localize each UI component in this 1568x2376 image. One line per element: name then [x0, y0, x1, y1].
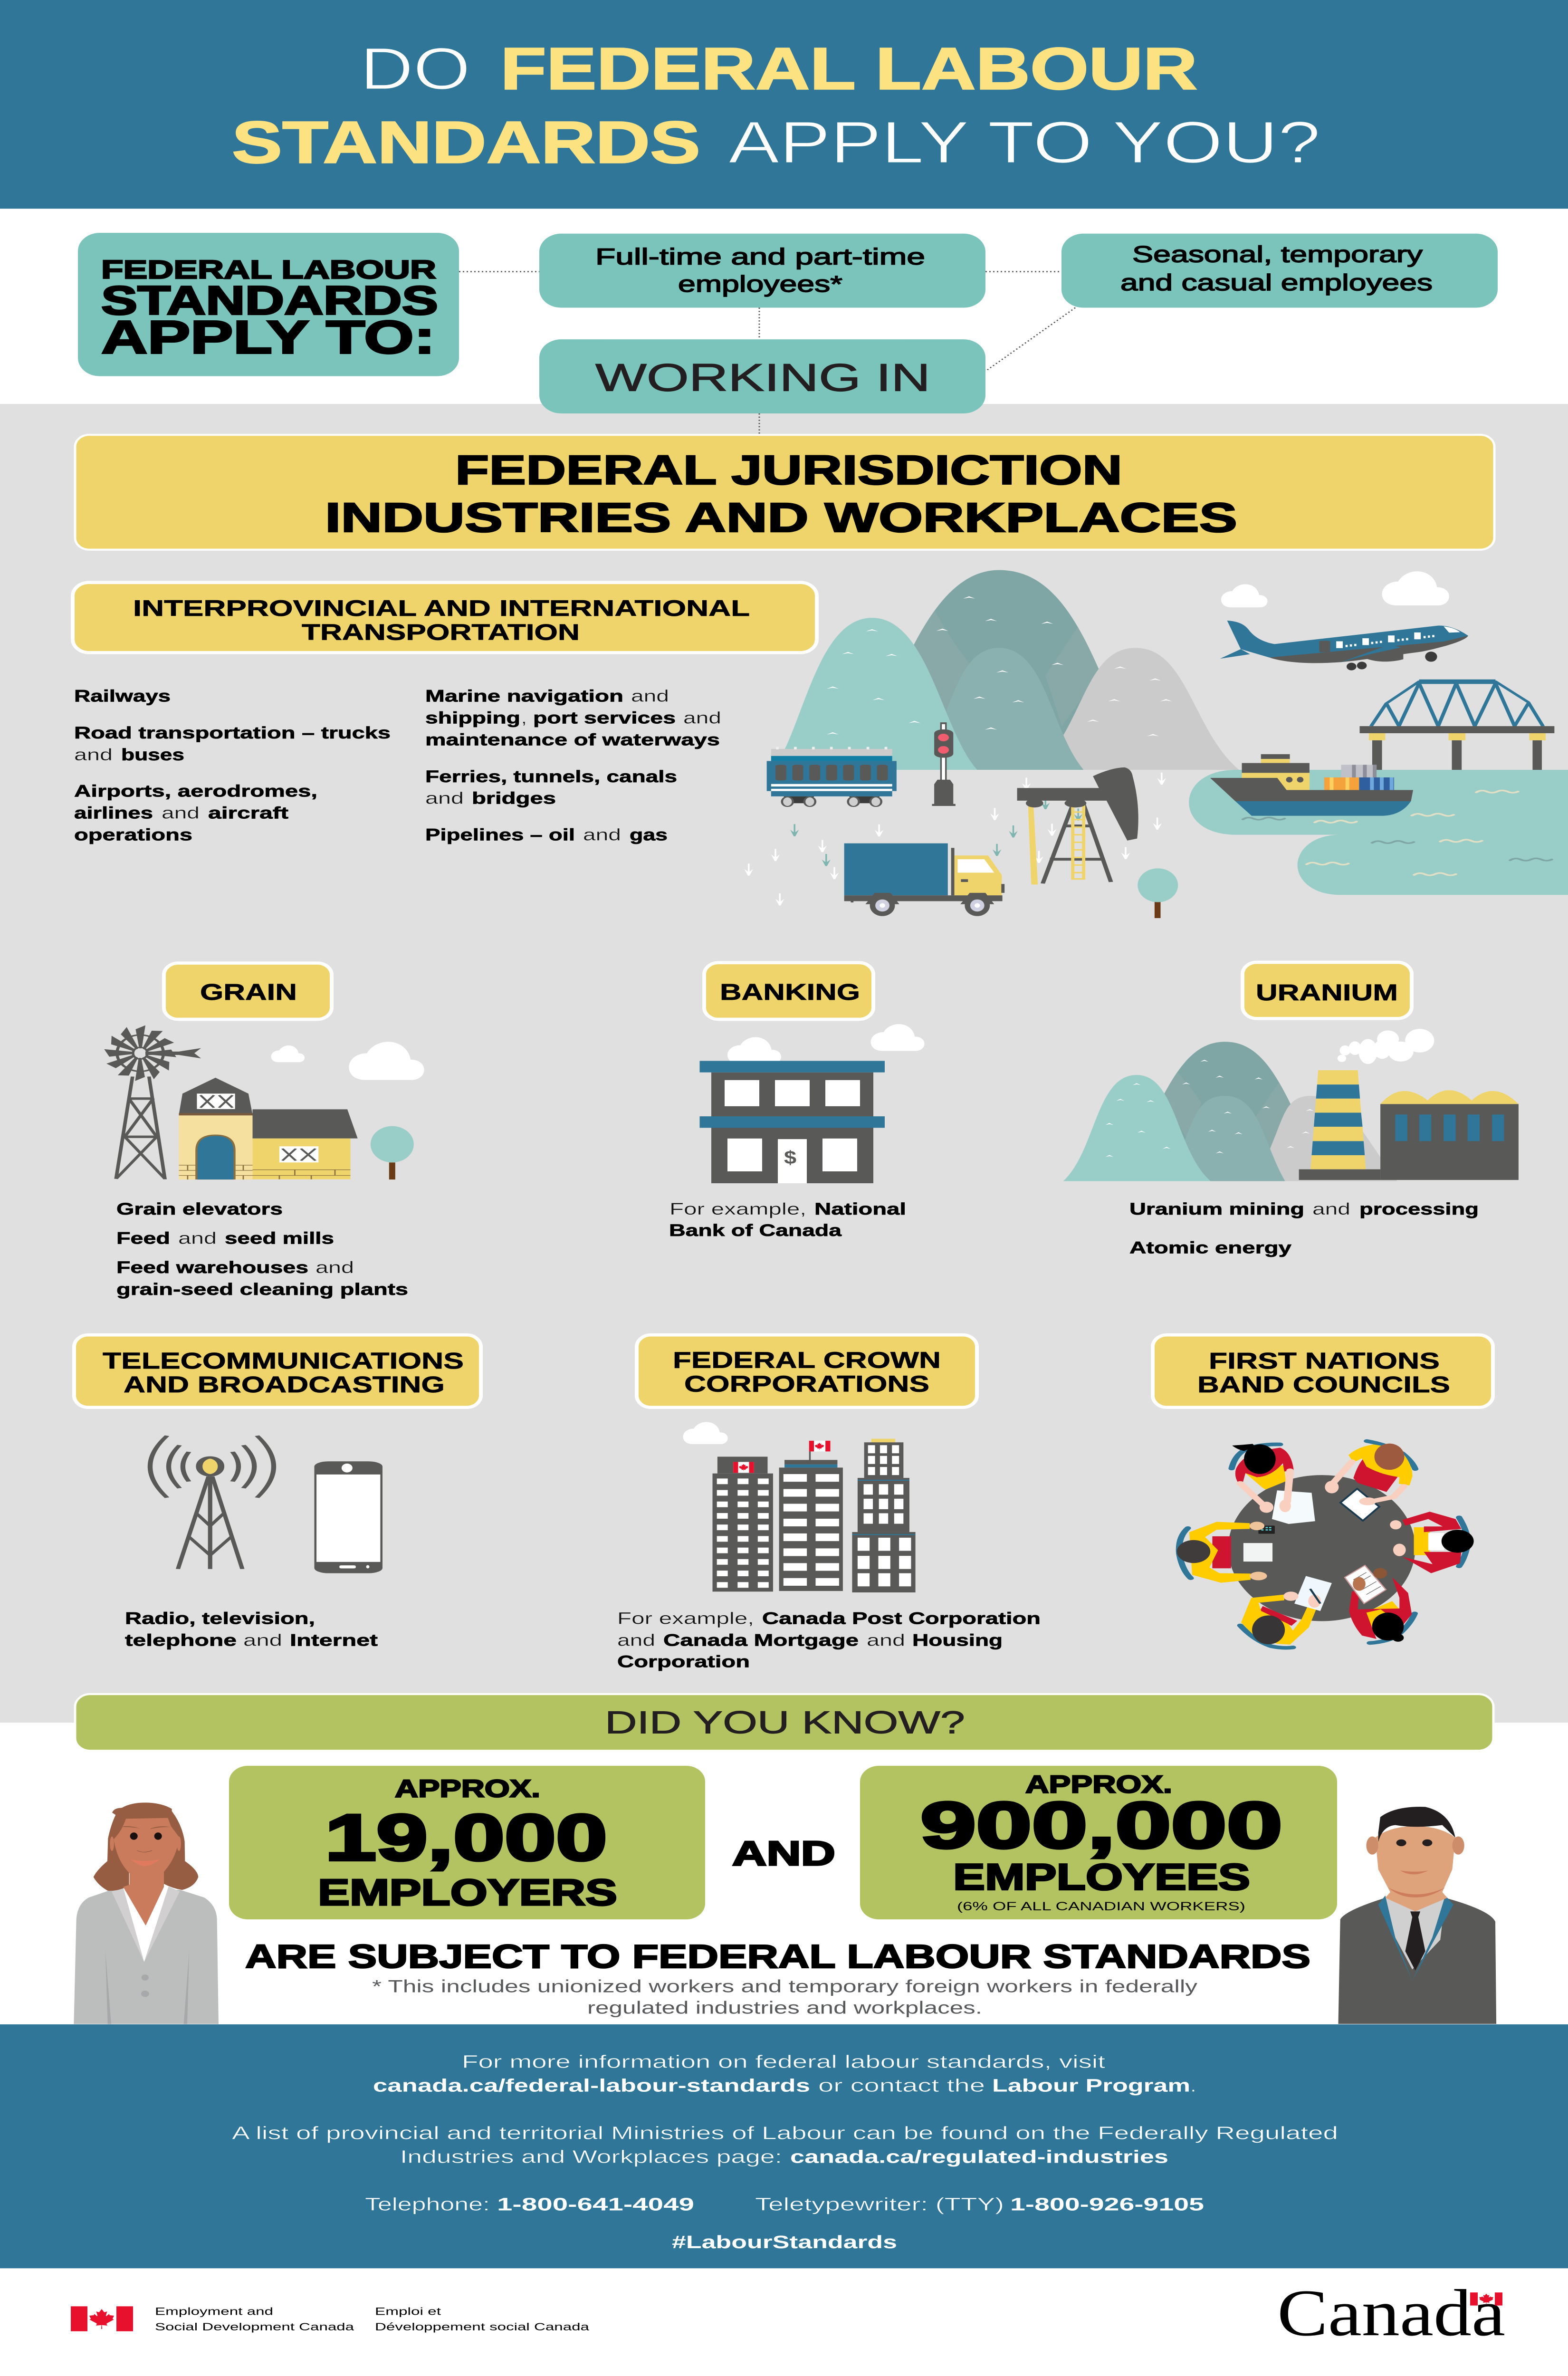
icon: windmill — [104, 1025, 201, 1179]
stat: 19,000 employers: 19,000 — [325, 1801, 607, 1874]
stat: 19,000 employers — [229, 1766, 705, 1919]
stepped tower — [852, 1439, 916, 1592]
text block: uranium list: processing — [1359, 1200, 1479, 1218]
text block: transportation list right: Marine navigation — [425, 687, 623, 706]
text block: banking example: National — [814, 1200, 906, 1218]
department names: Social Development Canada — [155, 2321, 354, 2333]
icon: tree — [371, 1126, 414, 1179]
text block: ministries of labour: A list of provincial and territorial Ministries of Labour can be found on the Federally Regulated — [232, 2123, 1338, 2143]
panel: transportation — [73, 570, 1568, 918]
text block: crown corporation examples — [617, 1610, 1041, 1671]
heading: federal jurisdiction industries and workplaces: INDUSTRIES AND WORKPLACES — [325, 495, 1237, 541]
text block: crown corporation examples: Canada Post Corporation — [762, 1610, 1041, 1628]
text block: crown corporation examples: Housing — [912, 1631, 1003, 1649]
box: working in — [539, 339, 985, 413]
text block: transportation list right: maintenance of waterways — [425, 731, 720, 749]
box: full-time and part-time employees: employees* — [678, 272, 842, 297]
heading: telecommunications and broadcasting — [74, 1335, 481, 1408]
text block: phone numbers — [365, 2194, 1204, 2214]
box: working in: WORKING IN — [595, 356, 930, 400]
heading: federal crown corporations — [637, 1335, 977, 1408]
person: top right — [1325, 1444, 1413, 1505]
panel: banking — [669, 963, 925, 1240]
heading: telecommunications and broadcasting: AND BROADCASTING — [124, 1372, 445, 1398]
icon: canadian flag — [71, 2306, 133, 2331]
text block: transportation list left: Airports, aerodromes, — [74, 782, 317, 801]
illustration: radio tower and phone — [150, 1436, 382, 1573]
heading: first nations band councils: FIRST NATIONS — [1209, 1348, 1440, 1374]
heading: telecommunications and broadcasting: TELECOMMUNICATIONS — [103, 1348, 464, 1374]
text block: crown corporation examples: Corporation — [617, 1653, 750, 1671]
department names: Développement social Canada — [375, 2321, 589, 2333]
text block: transportation list right — [425, 687, 721, 844]
person: bottom right — [1345, 1565, 1412, 1642]
icon: delivery truck — [844, 843, 1004, 916]
text block: transportation list left: buses — [121, 746, 184, 764]
text block: more information: . — [1190, 2075, 1196, 2096]
icon: smokestack — [1310, 1070, 1366, 1169]
stat: 900,000 employees: APPROX. — [1025, 1771, 1172, 1798]
heading: first nations band councils: BAND COUNCILS — [1197, 1372, 1450, 1398]
panel: uranium — [1063, 962, 1519, 1257]
text block: grain list: and — [316, 1258, 354, 1277]
hashtag: #LabourStandards — [672, 2232, 897, 2252]
text block: phone numbers: 1-800-641-4049 — [497, 2194, 694, 2214]
text block: transportation list left: Road transportation – trucks — [74, 724, 391, 742]
illustration: office towers — [683, 1422, 916, 1592]
connector word: and: AND — [732, 1834, 835, 1872]
text block: transportation list right: Pipelines – oil — [425, 826, 575, 844]
heading: banking — [704, 963, 873, 1019]
box: seasonal, temporary and casual employees: Seasonal, temporary — [1132, 242, 1423, 268]
title: STANDARDS — [232, 109, 700, 176]
box: federal labour standards apply to: APPLY TO: — [101, 312, 435, 364]
text block: ministries of labour — [232, 2123, 1338, 2167]
icon: oil pump jack — [1017, 767, 1138, 884]
department names — [155, 2306, 589, 2333]
title: FEDERAL LABOUR — [500, 36, 1197, 102]
heading: grain — [164, 963, 332, 1019]
text block: transportation list left: airlines — [74, 804, 153, 823]
text block: grain list — [116, 1200, 408, 1299]
text block: grain list: and — [178, 1229, 217, 1248]
figure: man in dark suit — [1338, 1807, 1496, 2024]
illustration: mine and plant — [1063, 1029, 1519, 1181]
mountains — [773, 570, 1239, 770]
building with flag — [713, 1456, 773, 1591]
heading: federal crown corporations: CORPORATIONS — [684, 1371, 929, 1397]
department names: Emploi et — [375, 2306, 441, 2318]
footer contact panel — [0, 2024, 1568, 2268]
icon: smartphone — [314, 1461, 382, 1573]
person: bottom left — [1241, 1576, 1332, 1645]
text block: transportation list right: and — [683, 709, 721, 728]
header banner with title — [0, 0, 1568, 209]
box: federal labour standards apply to: FEDERAL LABOUR — [101, 255, 436, 284]
text block: transportation list right: bridges — [472, 789, 556, 808]
box: federal labour standards apply to — [78, 233, 459, 376]
stat: 900,000 employees — [860, 1766, 1337, 1919]
icon: train car — [767, 747, 897, 806]
footnote: regulated industries and workplaces. — [587, 1998, 982, 2018]
text block: banking example: Bank of Canada — [669, 1221, 842, 1240]
text block: transportation list left — [74, 687, 391, 844]
title: DO — [360, 36, 470, 102]
text block: more information: or contact the — [818, 2075, 985, 2096]
text block: crown corporation examples: For example, — [617, 1610, 754, 1628]
text block: transportation list left: Railways — [74, 687, 171, 706]
chairs — [1179, 1441, 1468, 1648]
text block: uranium list: and — [1312, 1200, 1350, 1218]
text block: phone numbers: Teletypewriter: (TTY) — [755, 2194, 1004, 2214]
grass marks — [745, 773, 1166, 905]
text block: crown corporation examples: and — [867, 1631, 905, 1649]
footnote: * This includes unionized workers and temporary foreign workers in federally — [372, 1976, 1198, 1996]
heading: interprovincial and international transportation: TRANSPORTATION — [302, 620, 580, 645]
text block: uranium list — [1129, 1200, 1479, 1257]
stat: 900,000 employees: EMPLOYEES — [953, 1857, 1250, 1898]
box: federal labour standards apply to: STANDARDS — [101, 278, 438, 323]
icon: smoke — [1338, 1029, 1434, 1064]
statement: are subject to federal labour standards: ARE SUBJECT TO FEDERAL LABOUR STANDARDS — [245, 1938, 1310, 1975]
text block: transportation list left: and — [162, 804, 200, 823]
box: full-time and part-time employees — [539, 234, 985, 308]
footnote — [372, 1976, 1198, 2018]
text block: transportation list left: operations — [74, 826, 192, 844]
heading: did you know — [75, 1694, 1493, 1751]
stat: 900,000 employees: (6% OF ALL CANADIAN WORKERS) — [957, 1899, 1245, 1913]
text block: uranium list: Atomic energy — [1129, 1239, 1292, 1257]
text block: grain list: seed mills — [225, 1229, 334, 1248]
text block: transportation list right: and — [583, 826, 621, 844]
logo: canada wordmark: Canada — [1277, 2276, 1505, 2350]
text block: transportation list right: and — [631, 687, 669, 706]
text block: more information: Labour Program — [992, 2075, 1190, 2096]
text block: transportation list right: shipping — [425, 709, 520, 728]
icon: factory — [1299, 1090, 1519, 1180]
text block: banking example: For example, — [669, 1200, 806, 1218]
stat: 900,000 employees: 900,000 — [920, 1789, 1282, 1862]
text block: grain list: Grain elevators — [116, 1200, 283, 1218]
icon: railway signal — [932, 722, 956, 806]
text block: telecom services: Radio, television, — [125, 1610, 315, 1628]
text block: grain list: Feed warehouses — [116, 1258, 308, 1277]
mountains — [1063, 1042, 1397, 1181]
text block: ministries of labour: canada.ca/regulated-industries — [790, 2146, 1168, 2167]
text block: grain list: Feed — [116, 1229, 170, 1248]
icon: clouds — [1221, 571, 1449, 607]
text block: uranium list: Uranium mining — [1129, 1200, 1304, 1218]
illustration: windmill and barn — [104, 1025, 424, 1179]
heading: first nations band councils — [1153, 1335, 1493, 1408]
text block: more information — [373, 2051, 1196, 2096]
panel: federal crown corporations — [617, 1335, 1041, 1671]
text block: telecom services: Internet — [290, 1631, 378, 1649]
text block: transportation list right: , — [521, 709, 527, 728]
icon: barn — [179, 1078, 358, 1179]
box: seasonal, temporary and casual employees — [1061, 234, 1498, 308]
stat: 19,000 employers: APPROX. — [395, 1775, 540, 1802]
text block: more information: canada.ca/federal-labour-standards — [373, 2075, 810, 2096]
text block: phone numbers: 1-800-926-9105 — [1010, 2194, 1204, 2214]
illustration: bank building: $ — [784, 1148, 796, 1168]
text block: transportation list right: Ferries, tunnels, canals — [425, 767, 677, 786]
icon: airplane — [1220, 621, 1468, 671]
heading: federal crown corporations: FEDERAL CROWN — [673, 1348, 941, 1373]
heading: interprovincial and international transportation — [73, 583, 817, 652]
table items — [1243, 1489, 1379, 1562]
text block: transportation list right: and — [425, 789, 464, 808]
text block: telecom services — [125, 1610, 378, 1649]
box: full-time and part-time employees: Full-time and part-time — [595, 244, 925, 270]
person: top left — [1232, 1444, 1294, 1513]
text block: crown corporation examples: and — [617, 1631, 655, 1649]
panel: first nations band councils — [1153, 1335, 1493, 1648]
figure: woman in grey jacket — [74, 1802, 219, 2024]
person: right — [1390, 1512, 1474, 1573]
heading: grain: GRAIN — [200, 980, 297, 1005]
logo: employment and social development canada — [71, 2306, 589, 2333]
text block: crown corporation examples: Canada Mortgage — [663, 1631, 859, 1649]
text block: banking example — [669, 1200, 906, 1240]
icon: cargo ship — [1210, 754, 1413, 816]
table — [1228, 1475, 1415, 1621]
icon: clouds — [271, 1042, 424, 1080]
heading: banking: BANKING — [720, 980, 860, 1005]
text block: more information: For more information on federal labour standards, visit — [462, 2051, 1105, 2072]
department names: Employment and — [155, 2306, 273, 2318]
text block: transportation list left: aircraft — [208, 804, 288, 823]
text block: ministries of labour: Industries and Workplaces page: — [400, 2146, 782, 2167]
heading: uranium — [1243, 962, 1412, 1018]
text block: telecom services: telephone — [125, 1631, 237, 1649]
illustration: transportation landscape — [745, 570, 1568, 918]
panel: grain — [104, 963, 424, 1299]
icon: radio tower — [150, 1436, 274, 1569]
text block: transportation list right: gas — [630, 826, 668, 844]
text block: telecom services: and — [243, 1631, 282, 1649]
dotted connector lines — [459, 272, 1075, 434]
icon: tree — [1138, 868, 1178, 918]
illustration: bank building — [699, 1024, 925, 1183]
heading: federal jurisdiction industries and workplaces: FEDERAL JURISDICTION — [455, 447, 1122, 493]
text block: phone numbers: Telephone: — [365, 2194, 490, 2214]
heading: federal jurisdiction industries and workplaces — [75, 435, 1494, 550]
title: APPLY TO YOU? — [728, 109, 1320, 176]
heading: did you know: DID YOU KNOW? — [605, 1705, 965, 1740]
heading: interprovincial and international transportation: INTERPROVINCIAL AND INTERNATIONAL — [133, 596, 750, 621]
water — [1189, 770, 1568, 895]
stat: 19,000 employers: EMPLOYERS — [318, 1872, 617, 1913]
text block: grain list: grain-seed cleaning plants — [116, 1280, 408, 1299]
title — [232, 36, 1320, 176]
panel: telecommunications — [74, 1335, 481, 1649]
person: left — [1177, 1522, 1267, 1583]
box: seasonal, temporary and casual employees: and casual employees — [1120, 270, 1433, 296]
icon: bridge — [1360, 680, 1554, 770]
text block: transportation list right: port services — [533, 709, 676, 728]
text block: transportation list left: and — [74, 746, 113, 764]
illustration: meeting around a table — [1177, 1441, 1474, 1648]
building with rooftop flag — [779, 1441, 843, 1591]
heading: uranium: URANIUM — [1256, 980, 1398, 1006]
